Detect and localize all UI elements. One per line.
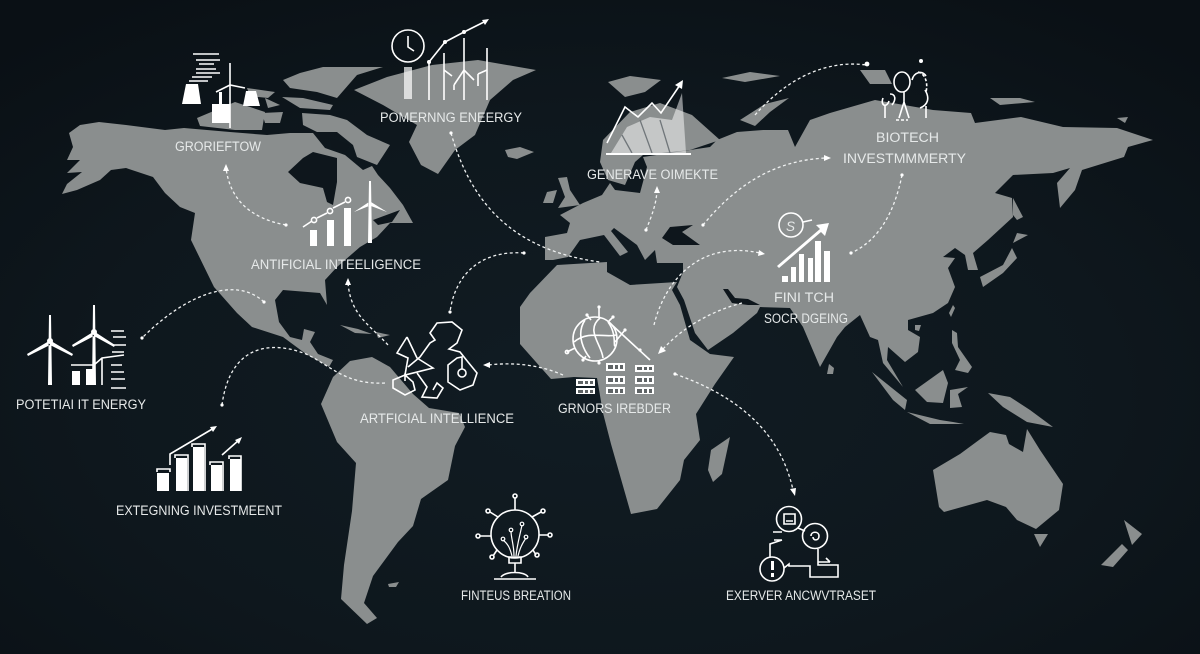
- Iceland: [505, 147, 534, 159]
- label: biotech: BIOTECH: [876, 130, 939, 145]
- icon: clock with growth turbines: [392, 19, 489, 100]
- Philippines: [952, 330, 972, 373]
- Australia: [933, 429, 1063, 529]
- Arctic islands: [197, 67, 390, 165]
- label: grorieftow: GRORIEFTOW: [175, 139, 261, 154]
- icon: connected circuit nodes: [760, 506, 838, 581]
- icon: biotech figure: [882, 72, 928, 120]
- New Guinea: [988, 393, 1053, 427]
- Sri Lanka: [827, 364, 834, 374]
- Taiwan and Hainan: [915, 305, 955, 331]
- world map landmasses: [62, 60, 1153, 624]
- label: investmmmerty: INVESTMMMERTY: [843, 151, 966, 166]
- label: generate oimekte: GENERAVE OIMEKTE: [587, 167, 718, 182]
- Eurasia: [545, 100, 1153, 387]
- Scandinavia: [600, 103, 720, 185]
- label: potetiai it energy: POTETIAI IT ENERGY: [16, 397, 146, 412]
- Madagascar: [708, 437, 730, 482]
- Sulawesi: [950, 387, 968, 408]
- North America: [62, 122, 413, 367]
- icon: wind and storage: [182, 54, 260, 128]
- icon: artificial intelligence swirl: [393, 322, 477, 398]
- inland seas: [288, 138, 760, 305]
- New Zealand: [1101, 520, 1142, 567]
- label: antificial inteeligence: ANTIFICIAL INTEELIGENCE: [251, 257, 421, 272]
- icon: mountain line chart: [606, 80, 691, 155]
- label: fintch: FINI TCH: [774, 290, 834, 305]
- Falklands: [388, 582, 399, 587]
- Svalbard and northern islands: [608, 70, 1128, 126]
- icon: idea bulb: [476, 494, 552, 579]
- Japan: [980, 248, 1017, 287]
- icon: bar chart and turbine: [303, 181, 387, 246]
- label: artificial intelligence: ARTFICIAL INTELLIENCE: [360, 411, 514, 426]
- Greenland: [354, 60, 536, 174]
- icon: fintech growth chart: [777, 213, 830, 282]
- Baja California: [224, 283, 239, 313]
- icon: investment bar chart: [157, 426, 242, 491]
- icon: fintech growth chart: S: [786, 219, 795, 234]
- icon: wind turbines and bars: [27, 305, 126, 388]
- label: exerver ancwvtraset: EXERVER ANCWVTRASET: [726, 588, 876, 603]
- label: socr dgeing: SOCR DGEING: [764, 311, 848, 326]
- Africa: [520, 262, 734, 514]
- icon: globe and servers: [565, 305, 654, 394]
- dashed connector arrows: [140, 59, 923, 496]
- Caribbean islands: [340, 325, 390, 338]
- label: grnors irebder: GRNORS IREBDER: [558, 401, 671, 416]
- Tasmania: [1034, 534, 1048, 547]
- Sakhalin and Hokkaido: [1013, 198, 1028, 243]
- South America: [321, 357, 465, 624]
- British Isles: [543, 177, 580, 208]
- label: finteus breation: FINTEUS BREATION: [461, 588, 571, 603]
- Sumatra and Java: [872, 372, 964, 424]
- Borneo: [915, 370, 948, 403]
- label: extegning investmeent: EXTEGNING INVESTMEENT: [116, 503, 282, 518]
- label: pomerning energy: POMERNNG ENEERGY: [380, 110, 522, 125]
